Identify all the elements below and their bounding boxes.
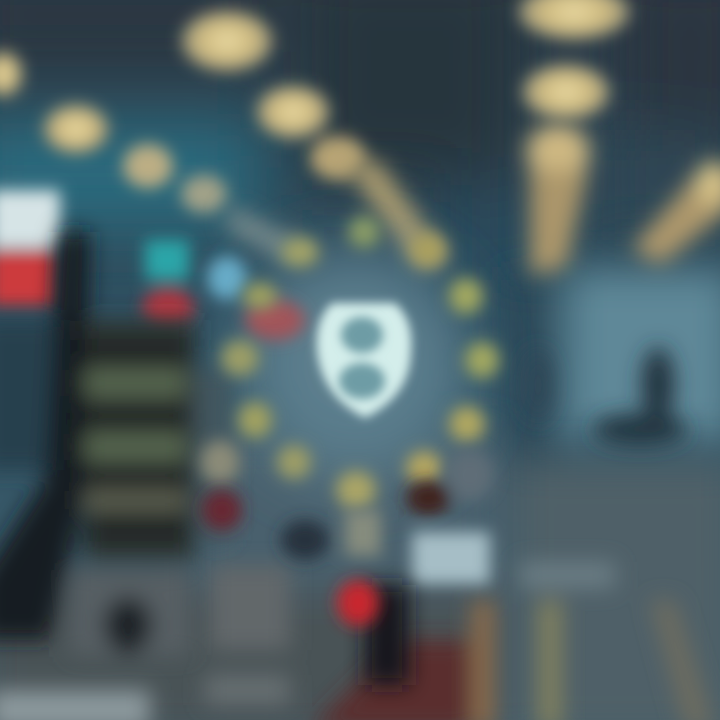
ceiling light strip: diagonal	[225, 160, 448, 272]
left signs	[0, 190, 305, 340]
ceiling lights: right column	[518, 0, 630, 120]
emblem: security shield with keyhole	[317, 303, 411, 418]
left shelving	[0, 232, 230, 655]
floor reflections	[0, 562, 715, 720]
accent: red garment	[337, 580, 379, 626]
background: ceiling shading	[0, 0, 720, 370]
ring of star markers	[200, 216, 499, 509]
panel: floor	[0, 430, 720, 720]
ceiling light strip: right	[632, 161, 720, 265]
emblem ring backdrop	[240, 250, 470, 480]
keyhole	[339, 317, 385, 399]
ceiling lights: left row	[0, 10, 366, 213]
figure: foreground person in red	[365, 585, 409, 685]
panel: right wall	[505, 270, 720, 500]
shield outer	[317, 303, 411, 418]
light strip: right column	[526, 124, 590, 275]
small figures and red accents	[202, 449, 494, 584]
person silhouette: right	[524, 347, 688, 446]
